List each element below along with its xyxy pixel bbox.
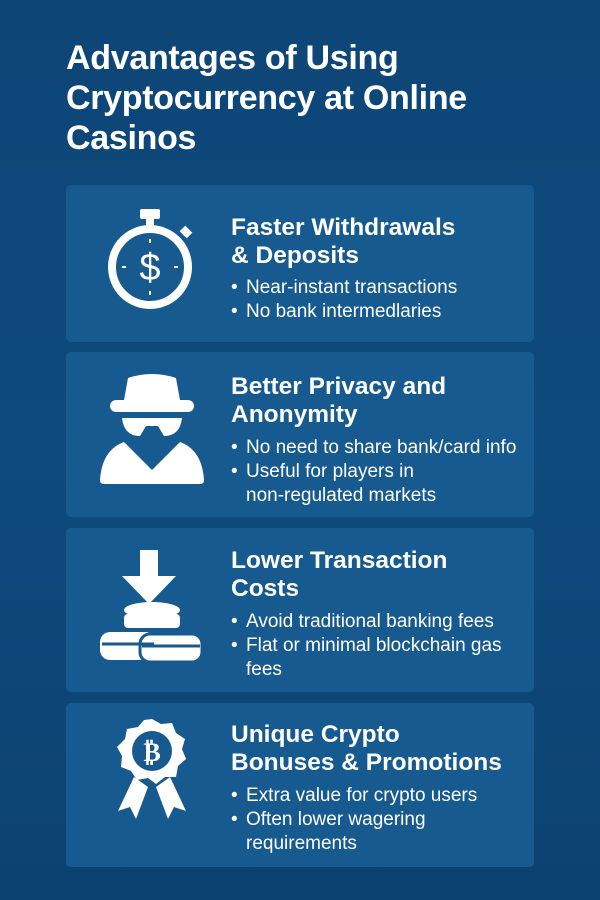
bullets — [232, 437, 516, 506]
bullets: Near-instant transactions — [246, 277, 457, 298]
heading: Anonymity — [231, 401, 358, 428]
bullets: Often lower wagering — [246, 809, 426, 830]
heading — [231, 373, 446, 428]
icon: bitcoin badge: ₿ — [143, 738, 161, 768]
panel: privacy — [66, 352, 534, 517]
panel: bonuses — [66, 703, 534, 867]
heading — [231, 721, 502, 776]
icon: coins and arrow — [100, 550, 200, 660]
bullets: No bank intermedlaries — [246, 301, 441, 322]
icon: spy — [100, 374, 204, 484]
icon: stopwatch: $ — [139, 247, 161, 289]
bullets: Avoid traditional banking fees — [246, 611, 494, 632]
title: Casinos — [66, 119, 196, 157]
heading: Unique Crypto — [231, 721, 400, 748]
heading: Costs — [231, 575, 299, 602]
bullets: No need to share bank/card info — [246, 437, 516, 458]
title: Cryptocurrency at Online — [66, 79, 467, 117]
icon: stopwatch — [108, 209, 192, 309]
heading: Faster Withdrawals — [231, 214, 455, 241]
bullets: Extra value for crypto users — [246, 785, 477, 806]
heading: & Deposits — [231, 242, 359, 269]
title: Advantages of Using — [66, 39, 398, 77]
bullets: Flat or minimal blockchain gas — [246, 635, 502, 656]
panel: lower costs — [66, 528, 534, 692]
bullets: non-regulated markets — [246, 485, 436, 506]
panel: faster withdrawals — [66, 185, 534, 342]
heading — [231, 547, 447, 602]
heading — [231, 214, 455, 269]
heading: Lower Transaction — [231, 547, 447, 574]
bullets — [232, 277, 457, 322]
bullets — [232, 785, 477, 854]
bullets: requirements — [246, 833, 357, 854]
bullets: fees — [246, 659, 282, 680]
heading: Bonuses & Promotions — [231, 749, 502, 776]
icon: bitcoin badge — [117, 719, 186, 819]
heading: Better Privacy and — [231, 373, 446, 400]
title — [66, 39, 467, 157]
bullets: Useful for players in — [246, 461, 414, 482]
bullets — [232, 611, 502, 680]
